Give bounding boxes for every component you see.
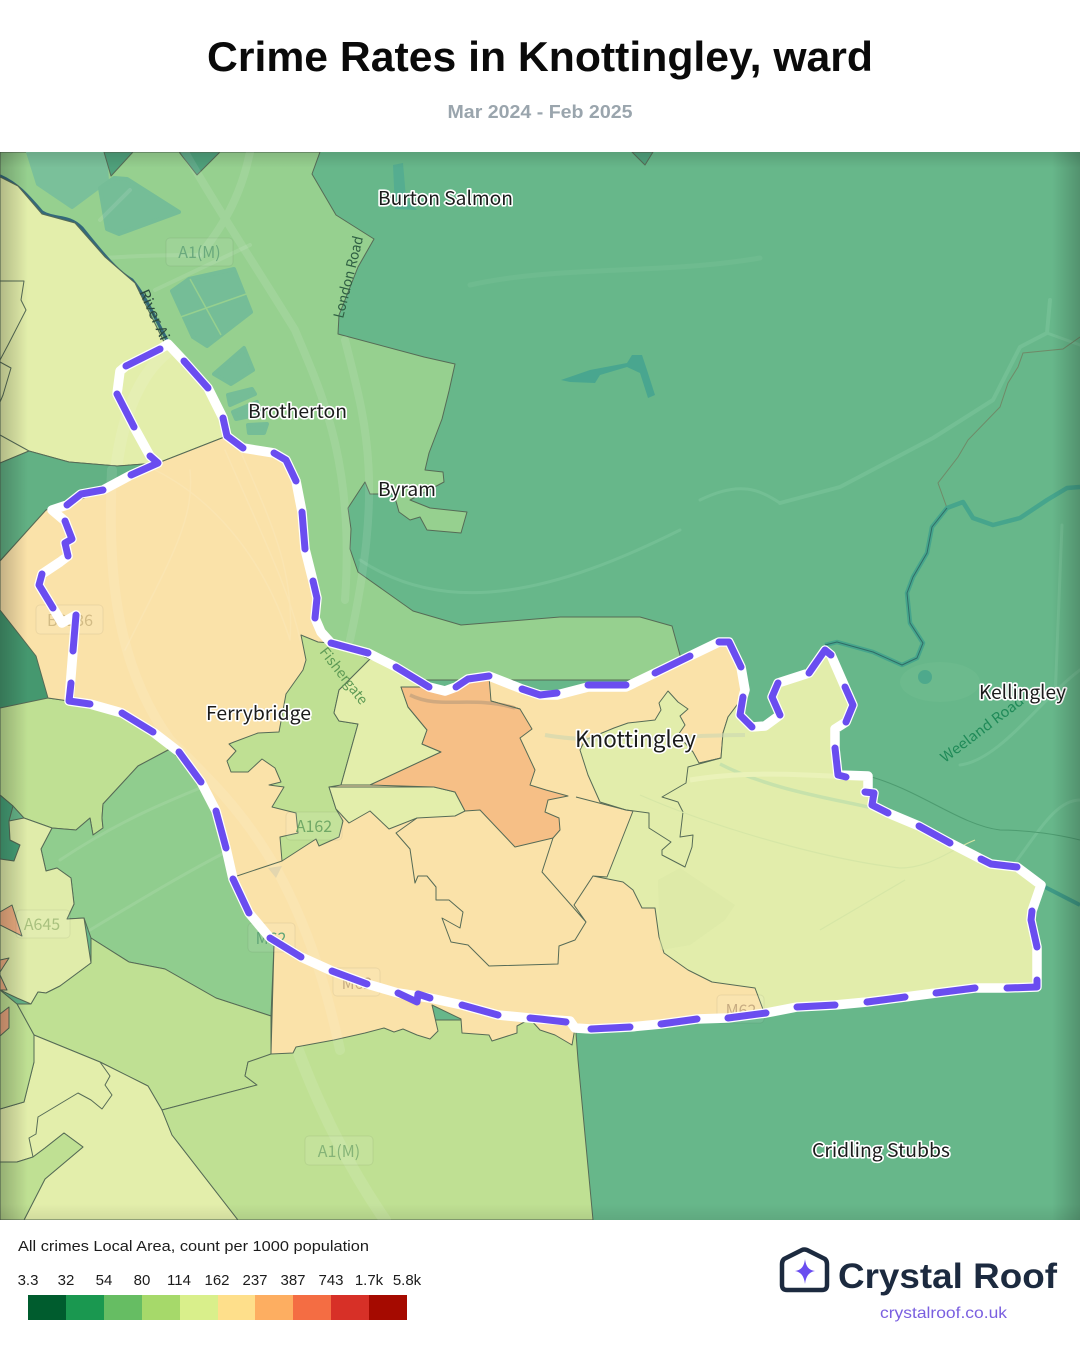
top dark wedges: [104, 152, 133, 176]
region: teal left: [0, 795, 20, 861]
region: light green south-west of ward: [0, 698, 170, 835]
road shield: A645: [16, 910, 70, 938]
faint terrain: [360, 258, 1080, 880]
region: pale yellow bottom-left: [0, 1035, 238, 1220]
road shield: A1(M) south: A1(M): [318, 1138, 360, 1162]
place label: Cridling Stubbs: Cridling Stubbs: [812, 1136, 950, 1163]
road shield: M62 east: [717, 995, 764, 1023]
road shield: M62 centre: [333, 968, 380, 996]
east thin boundary: [938, 337, 1080, 508]
place label: Byram: Byram: [378, 475, 436, 502]
road shield: A645: A645: [24, 911, 60, 935]
region: light green lower-left: [17, 938, 271, 1110]
road shield: B6136: B6136: [47, 607, 93, 631]
map edge shading: [0, 152, 28, 1220]
legend values: 3.3: [18, 1272, 38, 1289]
place label: Knottingley: Knottingley: [575, 722, 696, 754]
small orange patches: [0, 905, 22, 936]
east river: [825, 487, 1080, 665]
road shield: A1(M) north: A1(M): [178, 239, 221, 263]
legend values: 1.7k: [355, 1272, 384, 1289]
region: yellow north-west: [0, 177, 227, 466]
region: very dark west: [0, 610, 48, 708]
region: south light green: [162, 1020, 593, 1220]
railway and canal strokes: [720, 764, 872, 808]
road network north: [185, 152, 369, 640]
logo wordmark: Crystal Roof: [838, 1257, 1057, 1296]
website url: crystalroof.co.uk: [880, 1305, 1008, 1322]
road shield: B6136: [36, 605, 103, 634]
road name: River Aire: River Ai: [134, 286, 175, 343]
road shield: A162: A162: [296, 813, 332, 837]
legend values: 80: [134, 1272, 150, 1289]
title: Crime Rates in Knottingley, ward: [207, 33, 873, 80]
region: pale yellow east: [580, 650, 1041, 1012]
legend values: 162: [204, 1272, 230, 1289]
region: green around Ferrybridge: [227, 635, 370, 861]
legend values: 387: [280, 1272, 306, 1289]
peach interior boundaries: [234, 701, 593, 966]
legend values: 114: [167, 1272, 191, 1289]
road shield: A1(M) north: [166, 238, 233, 266]
road shield: M62 west: [248, 923, 295, 952]
legend values: 32: [58, 1272, 74, 1289]
road name: Fishergate: Fishergate: [315, 643, 373, 709]
road shield: M62 centre: M62: [342, 970, 372, 994]
river Aire: [0, 176, 168, 342]
icon: house with star: [782, 1250, 827, 1290]
legend: [18, 1238, 422, 1320]
place label: Brotherton: Brotherton: [248, 397, 347, 424]
ward boundary: [39, 344, 1041, 1029]
region: mid green north: [0, 152, 680, 680]
region: orange Knottingley centre: [370, 676, 568, 847]
region: green far-left strips: [0, 990, 34, 1109]
place label: Burton Salmon: Burton Salmon: [378, 184, 513, 211]
road shield: A162: [286, 812, 342, 840]
legend title: All crimes Local Area, count per 1000 population: [18, 1238, 369, 1255]
place label: Ferrybridge: Ferrybridge: [206, 699, 311, 726]
subtitle: date range: Mar 2024 - Feb 2025: [448, 102, 632, 122]
region: peach (Ferrybridge and south Knottingley): [0, 436, 764, 1054]
legend values: 54: [96, 1272, 112, 1289]
road name: London Road: London Road: [328, 234, 368, 320]
region: yellow cluster far left: [0, 818, 91, 1004]
lake: [561, 355, 655, 398]
logo: Crystal Roof: [782, 1250, 1057, 1322]
legend colour scale: [28, 1295, 407, 1320]
peach interior roads: [111, 470, 340, 1050]
legend values: 5.8k: [393, 1272, 422, 1289]
region: pale yellow centre: [334, 659, 441, 785]
road shield: M62 east: M62: [726, 997, 756, 1021]
road shield: A1(M) south: [305, 1136, 373, 1165]
legend values: 237: [242, 1272, 268, 1289]
place label: Kellingley: Kellingley: [979, 678, 1066, 705]
legend values: 743: [318, 1272, 344, 1289]
region: green centre-left: [41, 749, 274, 1016]
water bodies: [28, 152, 267, 433]
choropleth map: [0, 152, 1080, 1220]
road shield: M62 west: M62: [256, 925, 286, 949]
road name: Weeland Road: Weeland Road: [936, 691, 1028, 767]
legend values: [18, 1272, 422, 1289]
